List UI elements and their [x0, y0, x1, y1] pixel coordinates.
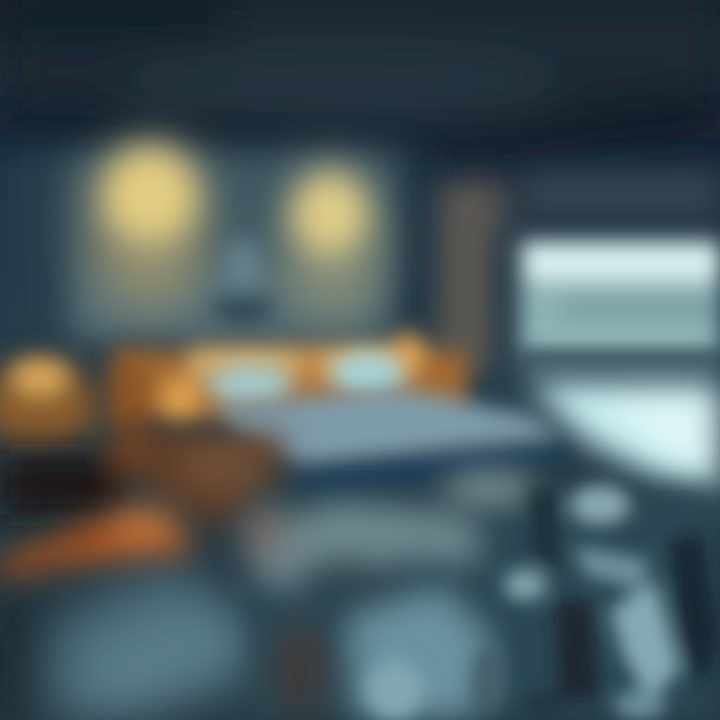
headboard	[115, 332, 470, 426]
curtain	[438, 180, 508, 370]
window: upper pane	[520, 240, 720, 355]
ceiling	[0, 0, 720, 160]
left furniture	[0, 360, 285, 525]
window: lower pane	[525, 382, 720, 495]
mattress side	[295, 442, 572, 500]
window sill	[520, 354, 720, 376]
duvet top	[215, 388, 565, 465]
wall art	[213, 238, 273, 322]
left bedside lamp	[0, 358, 100, 447]
wall lamp glow: left	[90, 140, 210, 310]
back wall	[0, 150, 435, 345]
wall lamp glow: right	[282, 164, 382, 316]
bed	[215, 388, 572, 500]
pillows	[208, 352, 404, 407]
foreground clutter	[239, 471, 720, 720]
mottled reflections	[367, 485, 720, 720]
orange rug	[0, 505, 195, 585]
wall above window	[495, 170, 720, 380]
foreground blanket	[0, 565, 285, 720]
